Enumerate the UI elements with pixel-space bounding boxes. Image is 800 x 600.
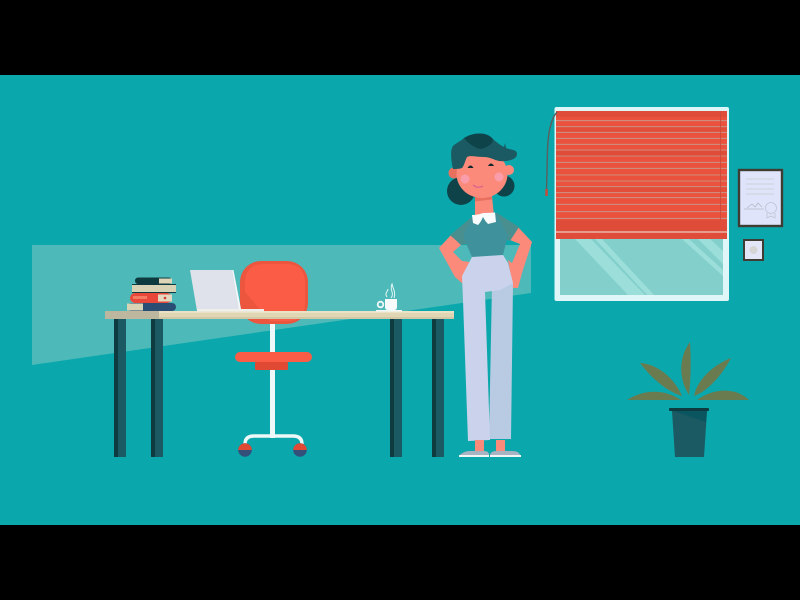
smile — [473, 185, 483, 187]
shirt — [450, 213, 519, 257]
window — [545, 107, 729, 301]
feet and shoes — [459, 440, 521, 457]
chair base — [245, 436, 302, 446]
background wall — [0, 75, 800, 525]
chair — [235, 261, 312, 457]
hair back — [447, 176, 514, 205]
top letterbox bar — [0, 0, 800, 75]
cheeks — [460, 172, 504, 184]
leaves — [627, 342, 749, 400]
chair back — [240, 261, 308, 324]
desk — [105, 311, 454, 457]
arms — [439, 227, 532, 288]
woman character — [439, 134, 532, 457]
neck — [475, 196, 494, 216]
coffee cup — [376, 284, 402, 312]
laptop — [190, 270, 264, 312]
ears — [448, 165, 514, 178]
trousers — [462, 255, 513, 441]
small picture frame — [744, 240, 763, 260]
framed certificate — [739, 170, 782, 226]
eyes — [468, 164, 494, 168]
bottom letterbox bar — [0, 525, 800, 600]
blind cord — [545, 112, 557, 196]
hair front — [451, 134, 517, 169]
chair seat — [235, 352, 312, 362]
face — [456, 150, 508, 198]
potted plant — [627, 342, 749, 457]
pot — [672, 411, 707, 457]
collar — [472, 212, 496, 225]
chair wheels — [238, 443, 307, 457]
light beam on wall — [32, 245, 531, 365]
stack of books — [127, 278, 176, 311]
red blinds — [556, 111, 727, 239]
